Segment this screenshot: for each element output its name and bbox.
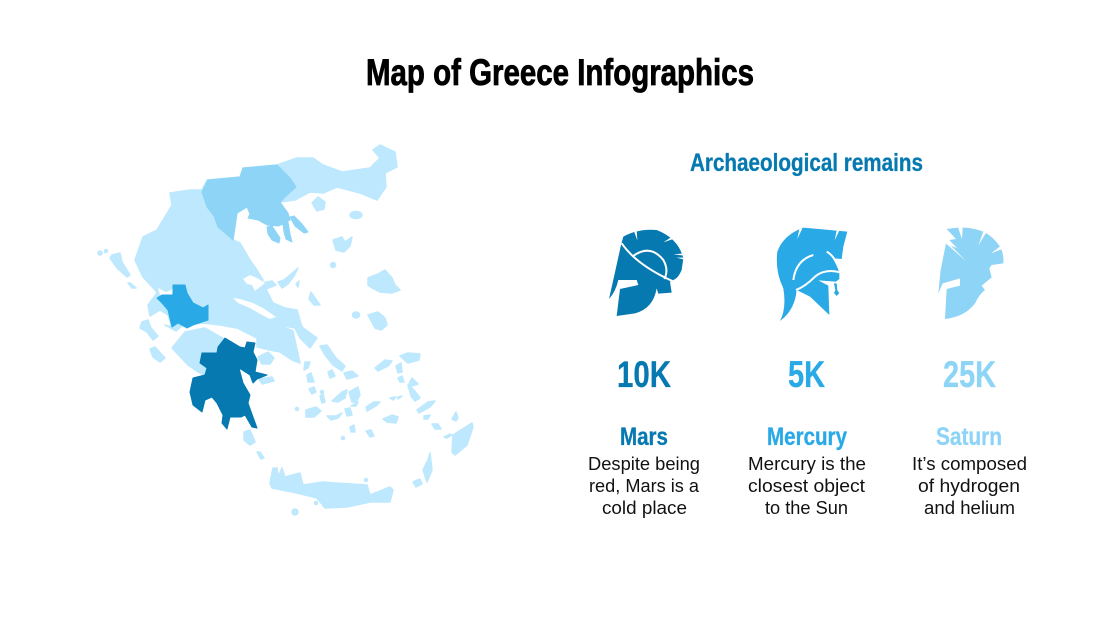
description: Saturn: It’s composed (912, 453, 1027, 474)
region: Macedonia (202, 165, 308, 243)
description: Saturn (912, 453, 1027, 518)
description: Mars (588, 453, 700, 518)
title: Map of Greece Infographics (366, 52, 754, 93)
label: Mercury: Mercury (767, 423, 847, 451)
column: Mercury (748, 228, 866, 518)
stat: 10K: 10K (617, 354, 671, 395)
map of Greece (98, 145, 473, 515)
label: Mars: Mars (620, 423, 668, 451)
stat: 25K: 25K (943, 354, 996, 395)
region: Epirus (157, 285, 208, 328)
description: Mercury: to the Sun (765, 497, 848, 518)
description: Mars: cold place (602, 497, 687, 518)
description: Saturn: of hydrogen (918, 475, 1020, 496)
label: Saturn: Saturn (936, 423, 1002, 451)
description: Mercury: closest object (748, 475, 865, 496)
icon: helmet dark (609, 230, 684, 316)
icon: helmet light (938, 226, 1004, 319)
description: Mercury: Mercury is the (748, 453, 866, 474)
stat: 5K: 5K (788, 354, 825, 395)
column: Mars (588, 230, 700, 518)
description: Saturn: and helium (924, 497, 1015, 518)
gulfs cut into the mainland (158, 275, 276, 319)
description: Mars: red, Mars is a (589, 475, 700, 496)
icon: helmet blue (777, 228, 847, 321)
heading: Archaeological remains: Archaeological remains (690, 149, 923, 177)
region: Peloponnese (190, 338, 267, 429)
column: Saturn (912, 226, 1027, 518)
region: mainland and islands (98, 145, 473, 515)
description: Mars: Despite being (588, 453, 700, 474)
description: Mercury (748, 453, 866, 518)
